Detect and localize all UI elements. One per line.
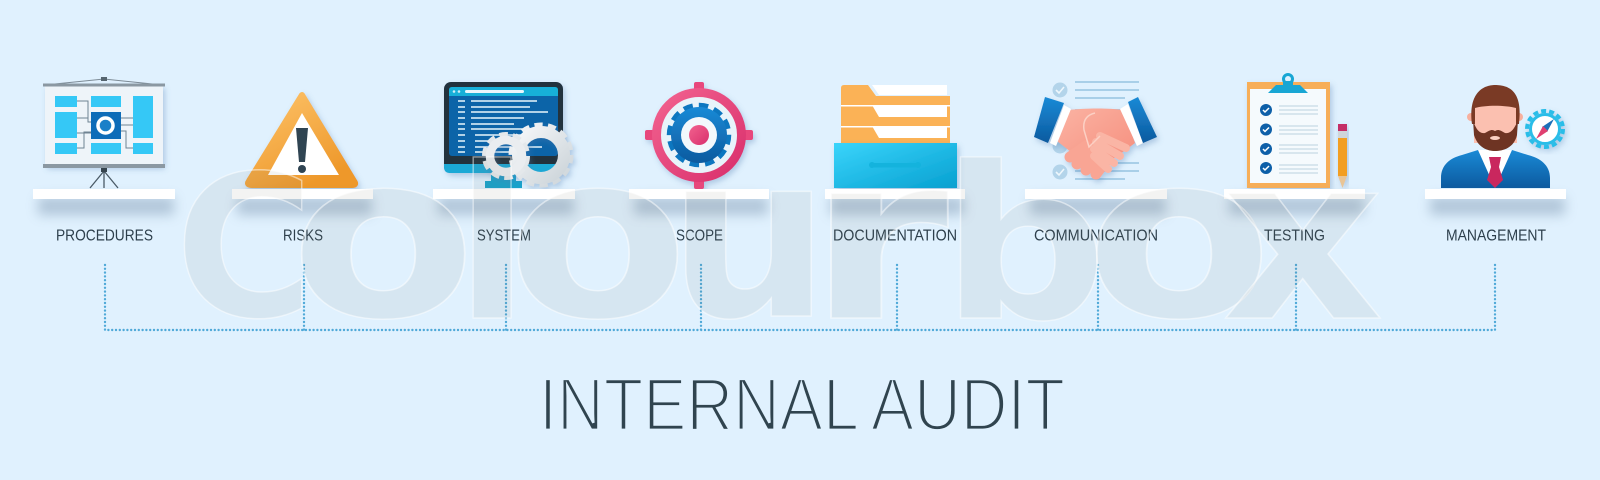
title: INTERNAL AUDIT (539, 363, 1065, 446)
label: procedures: PROCEDURES (56, 228, 153, 244)
icon: scope target with gear (645, 82, 753, 189)
icon: system monitor and gears (444, 82, 570, 188)
icon: management person with compass (1441, 85, 1563, 188)
shelf: procedures (33, 189, 175, 215)
shelf: documentation (825, 189, 965, 215)
shelf: scope (629, 189, 769, 215)
label: scope: SCOPE (676, 228, 723, 244)
icon: testing clipboard and pencil (1247, 74, 1347, 188)
watermark: o (290, 105, 476, 371)
watermark: C (175, 133, 314, 363)
shelf: testing (1224, 189, 1365, 215)
label: documentation: DOCUMENTATION (833, 228, 957, 244)
shelf: communication (1025, 189, 1167, 215)
label: testing: TESTING (1264, 228, 1325, 244)
watermark: u (668, 104, 830, 370)
watermark: b (941, 122, 1107, 369)
shelf: system (433, 189, 575, 215)
watermark (175, 104, 1384, 373)
watermark: o (1085, 105, 1273, 370)
label: communication: COMMUNICATION (1034, 228, 1158, 244)
icon: procedures presentation board (43, 77, 165, 188)
label: management: MANAGEMENT (1446, 228, 1546, 244)
watermark: o (507, 105, 689, 370)
icon: risks warning triangle (248, 95, 355, 185)
shelf: management (1425, 189, 1566, 215)
label: risks: RISKS (283, 228, 323, 244)
shelf: risks (232, 189, 373, 215)
dotted connector bracket (105, 265, 1495, 330)
label: system: SYSTEM (477, 228, 531, 244)
watermark: l (455, 121, 529, 368)
watermark: r (807, 107, 951, 373)
icon: communication handshake (1034, 82, 1157, 180)
icon: documentation folder drawer (834, 85, 957, 188)
watermark: x (1222, 107, 1384, 372)
